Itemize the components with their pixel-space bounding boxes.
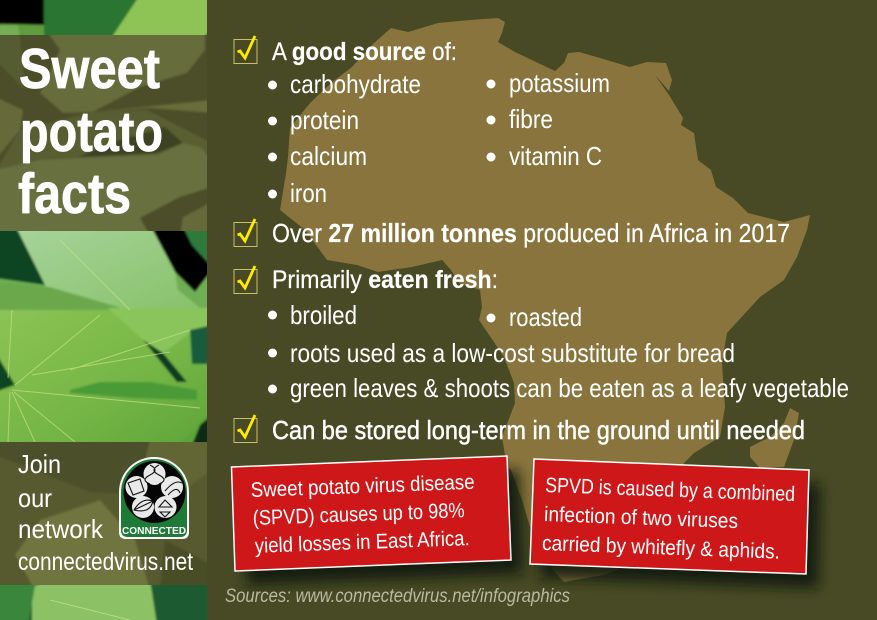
join band: our [18,483,52,513]
list: ways of eating: roots used as a low-cost substitute for bread [290,338,735,368]
join band: connectedvirus.net [18,548,193,576]
list: nutrients column 1: iron [290,178,327,208]
title band [0,32,212,235]
fact: storage: Can be stored long-term in the ground until needed [272,415,805,445]
callout: yield losses [232,456,523,585]
list: nutrients column 2: fibre [509,104,553,134]
heading [18,48,162,214]
callout: yield losses: yield losses in East Africa. [254,527,470,558]
icon: checkbox 1 [234,36,257,64]
list: nutrients column 1: calcium [290,141,367,171]
list: ways of eating [268,300,849,403]
callout: virus cause: infection of two viruses [544,503,738,533]
list: ways of eating: broiled [290,300,357,330]
heading: potato [20,100,163,164]
list: nutrients column 2: vitamin C [509,141,602,171]
icon: CONNECTED logo: CONNECTED [122,526,186,537]
join text: Join [18,449,61,479]
icon: checkbox 2 [234,219,257,246]
list: nutrients column 2: potassium [509,68,610,98]
join band: network [18,514,104,544]
list: ways of eating: roasted [509,302,582,332]
map of Africa [280,18,810,582]
icon: CONNECTED logo [119,457,189,539]
list: nutrients column 1 [268,69,421,208]
sources: Sources: www.connectedvirus.net/infographics [225,586,570,607]
photo sidebar: sweet potato leaves [0,0,212,620]
list: nutrients column 1: carbohydrate [290,69,421,99]
callout: virus cause: carried by whitefly & aphids. [542,532,780,564]
list: nutrients column 1: protein [290,105,359,135]
icon: checkbox 3 [234,266,257,294]
fact: good source: A good source of: [272,38,457,66]
fact: production: Over 27 million tonnes produced in Africa in 2017 [272,218,790,248]
callout: virus cause: SPVD is caused by a combined [545,474,795,506]
icon: checkbox 4 [234,415,257,442]
list: nutrients column 2 [486,68,610,171]
heading: facts [18,162,131,226]
join band [0,440,212,590]
callout: yield losses: (SPVD) causes up to 98% [252,499,465,530]
callout: virus cause [530,459,820,588]
callout: yield losses: Sweet potato virus disease [250,471,475,502]
fact: eaten fresh: Primarily eaten fresh: [272,266,498,294]
heading: Sweet [19,37,160,101]
